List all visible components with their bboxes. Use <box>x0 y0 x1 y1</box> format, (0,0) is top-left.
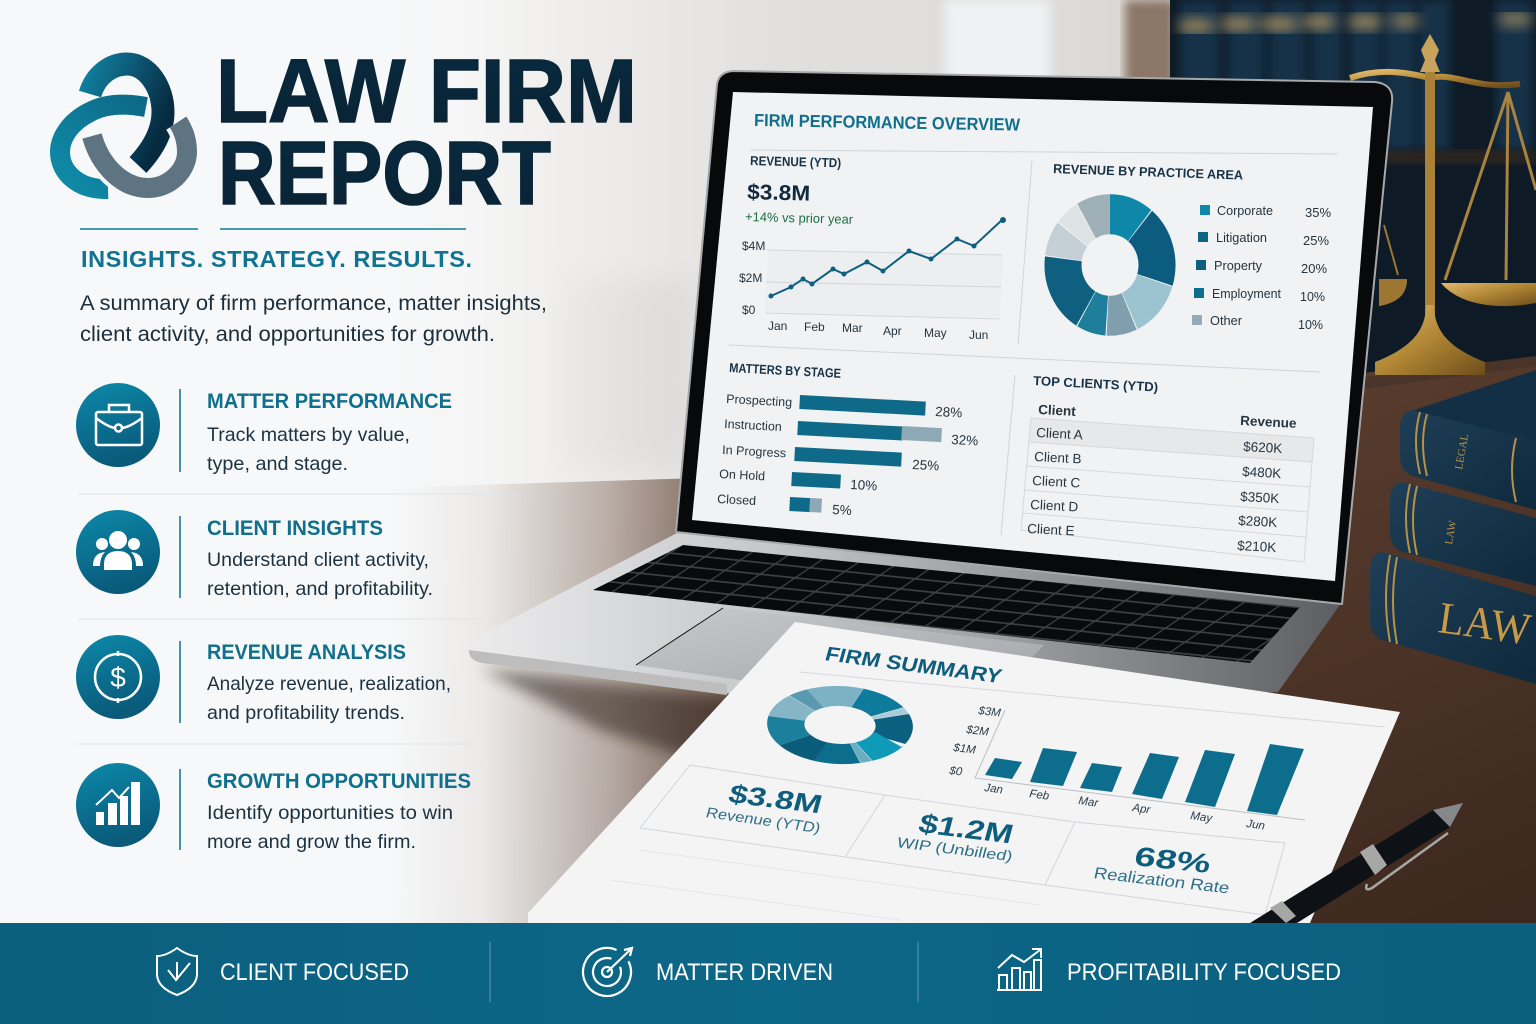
paper bar chart: $0 <box>948 765 963 779</box>
logo <box>60 64 187 189</box>
top clients table: Client A <box>1036 425 1083 442</box>
practice area legend: 20% <box>1301 261 1327 276</box>
practice area legend: 35% <box>1305 205 1331 220</box>
feature: growth opportunities <box>76 763 471 853</box>
practice area legend: 10% <box>1300 289 1325 304</box>
practice area legend: Corporate <box>1217 203 1273 218</box>
feature: growth opportunities: more and grow the firm. <box>207 831 416 853</box>
pen <box>1250 803 1463 923</box>
feature: growth opportunities: GROWTH OPPORTUNITIES <box>207 770 471 793</box>
revenue line chart: $3.8M <box>747 180 810 206</box>
feature: matter performance: Track matters by value, <box>207 424 410 446</box>
title: REPORT <box>218 124 551 224</box>
icon: dollar coin: $ <box>110 662 126 693</box>
paper KPI boxes: Revenue (YTD) <box>704 805 822 837</box>
practice area legend: 25% <box>1303 233 1329 248</box>
top clients table: Client C <box>1032 473 1081 491</box>
paper: firm summary <box>528 622 1400 923</box>
top clients table: Client <box>1038 402 1077 419</box>
feature: client insights: retention, and profitability. <box>207 578 433 600</box>
laptop lid <box>676 71 1392 604</box>
top clients table <box>1021 373 1314 562</box>
footer band: CLIENT FOCUSED <box>220 959 409 986</box>
paper KPI boxes <box>640 765 1285 915</box>
top clients table: Client E <box>1027 521 1075 538</box>
revenue line chart: REVENUE (YTD) <box>750 153 841 170</box>
practice area legend: Property <box>1214 258 1262 273</box>
icon: dollar coin <box>95 651 141 703</box>
laptop <box>469 71 1392 697</box>
screen <box>692 92 1373 581</box>
icon: target <box>575 940 639 1004</box>
feature: matter performance: MATTER PERFORMANCE <box>207 390 452 413</box>
feature: matter performance <box>76 383 452 475</box>
revenue line chart: $0 <box>742 303 756 317</box>
laptop base <box>469 533 1342 697</box>
matters by stage bars: Closed <box>717 492 756 508</box>
matters by stage bars: Instruction <box>724 417 782 434</box>
icon: growth chart <box>997 949 1042 990</box>
revenue line chart: +14% vs prior year <box>745 209 854 227</box>
top clients table: Client D <box>1030 497 1079 515</box>
matters by stage bars: 32% <box>951 432 979 448</box>
paper KPI boxes: 68% <box>1132 840 1214 879</box>
practice area legend: Litigation <box>1216 230 1267 245</box>
paper heading: FIRM SUMMARY <box>823 644 1005 688</box>
paper bar chart: Apr <box>1131 802 1152 817</box>
revenue by practice area donut: REVENUE BY PRACTICE AREA <box>1053 161 1244 183</box>
stacked law books <box>1370 370 1536 684</box>
feature: client insights <box>76 510 433 600</box>
brass scales of justice <box>1350 34 1536 375</box>
stacked law books: LAW <box>1443 519 1459 546</box>
description: client activity, and opportunities for growth. <box>80 322 495 346</box>
paper KPI boxes: Realization Rate <box>1092 864 1231 897</box>
practice area legend: Employment <box>1212 286 1281 301</box>
footer band: PROFITABILITY FOCUSED <box>1067 959 1341 986</box>
laptop shadow on desk <box>480 668 800 770</box>
paper KPI boxes: $1.2M <box>915 808 1017 849</box>
top clients table: $620K <box>1243 439 1283 456</box>
practice area legend <box>1192 203 1331 332</box>
matters by stage bars: Prospecting <box>726 392 793 409</box>
feature: client insights: CLIENT INSIGHTS <box>207 517 383 540</box>
paper bar chart <box>948 705 1305 833</box>
top clients table: Revenue <box>1240 413 1297 431</box>
matters by stage bars: 28% <box>935 404 963 420</box>
feature: revenue analysis <box>76 635 451 724</box>
revenue line chart: May <box>924 326 947 340</box>
footer band <box>0 923 1536 1024</box>
paper KPI boxes: WIP (Unbilled) <box>895 835 1014 865</box>
top clients table: $480K <box>1242 464 1282 481</box>
matters by stage bars: 10% <box>850 477 878 493</box>
paper bar chart: Mar <box>1078 795 1100 810</box>
feature: growth opportunities: Identify opportunities to win <box>207 802 453 824</box>
tagline: INSIGHTS. STRATEGY. RESULTS. <box>81 246 472 272</box>
revenue line chart: Feb <box>804 320 825 334</box>
top clients table: $350K <box>1240 489 1280 506</box>
top clients table: $280K <box>1238 513 1278 530</box>
feature: revenue analysis: Analyze revenue, realization, <box>207 673 451 695</box>
icon: shield <box>157 948 197 995</box>
revenue line chart: Mar <box>842 321 863 335</box>
paper bar chart: $1M <box>952 742 977 757</box>
practice area legend: 10% <box>1298 317 1323 332</box>
revenue line chart: $2M <box>739 271 762 285</box>
revenue line chart: Jan <box>768 319 787 333</box>
matters by stage bars: On Hold <box>719 467 765 483</box>
feature: client insights: Understand client activity, <box>207 549 429 571</box>
paper bar chart: Feb <box>1029 788 1050 803</box>
keyboard <box>593 545 1300 663</box>
icon: briefcase <box>96 405 142 445</box>
title <box>216 42 637 224</box>
paper bar chart: May <box>1190 810 1214 825</box>
top clients table: TOP CLIENTS (YTD) <box>1033 373 1158 395</box>
top clients table: $210K <box>1237 538 1277 555</box>
matters by stage bars: In Progress <box>722 443 786 460</box>
left white fade panel <box>0 0 780 923</box>
matters by stage bars: 5% <box>832 502 852 518</box>
feature: revenue analysis: REVENUE ANALYSIS <box>207 641 406 664</box>
trackpad <box>636 608 1044 690</box>
screen heading: FIRM PERFORMANCE OVERVIEW <box>754 110 1021 135</box>
practice area legend: Other <box>1210 313 1243 328</box>
matters by stage bars <box>717 360 979 518</box>
description: A summary of firm performance, matter insights, <box>80 291 547 315</box>
title: LAW FIRM <box>216 42 637 142</box>
paper donut <box>762 681 918 769</box>
paper KPI boxes: $3.8M <box>725 779 826 819</box>
feature: matter performance: type, and stage. <box>207 453 348 475</box>
icon: people <box>93 531 143 570</box>
footer band: MATTER DRIVEN <box>656 959 833 986</box>
matters by stage bars: MATTERS BY STAGE <box>729 360 842 381</box>
icon: growth bars <box>96 782 140 825</box>
feature: revenue analysis: and profitability trends. <box>207 702 405 724</box>
matters by stage bars: 25% <box>912 457 940 473</box>
revenue by practice area donut <box>1044 161 1244 337</box>
revenue line chart: Apr <box>883 324 902 338</box>
paper bar chart: Jan <box>983 782 1004 797</box>
revenue line chart <box>739 153 1006 342</box>
revenue line chart: $4M <box>742 239 765 253</box>
revenue line chart: Jun <box>969 328 988 342</box>
paper bar chart: $2M <box>965 724 990 739</box>
paper bar chart: Jun <box>1245 818 1266 833</box>
paper bar chart: $3M <box>977 705 1002 720</box>
stacked law books: LEGAL <box>1453 433 1471 471</box>
top clients table: Client B <box>1034 449 1082 466</box>
description <box>80 291 547 346</box>
